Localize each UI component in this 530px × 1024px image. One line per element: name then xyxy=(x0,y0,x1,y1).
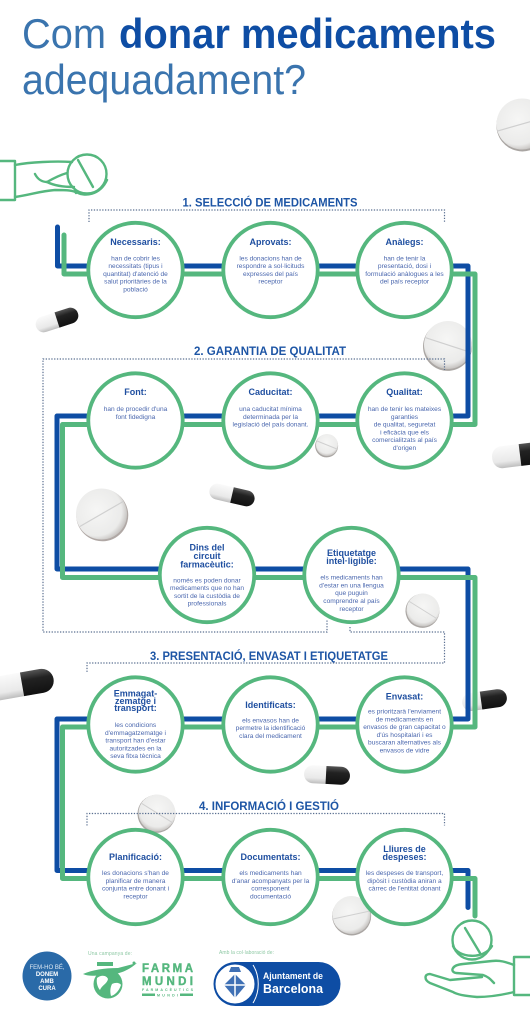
icon: capsule 2 xyxy=(208,482,256,508)
logo: Fem-ho bé, donem amb cura: CURA xyxy=(38,986,56,992)
title xyxy=(22,10,496,103)
icon: capsule right edge xyxy=(491,440,530,469)
panel: Emmagatzematge i transport xyxy=(88,677,183,772)
heading: section 4: 4. INFORMACIÓ I GESTIÓ xyxy=(199,798,339,813)
icon: capsule right of Envasat xyxy=(461,688,508,712)
panel: Dins del circuit farmacèutic: medicaments que no han xyxy=(170,585,244,592)
panel: Caducitat: legislació del país donant. xyxy=(233,422,309,429)
panel: Etiquetatge intel·ligible: receptor xyxy=(339,606,364,613)
panel: Envasat: Envasat: xyxy=(386,692,423,702)
panel: Documentats: els medicaments han xyxy=(239,870,302,877)
logo: Farmamundi xyxy=(83,951,194,998)
section bracket dotted lines xyxy=(43,210,444,826)
panel: Qualitat xyxy=(357,373,452,468)
icon: capsule centre xyxy=(304,765,350,785)
panel: Emmagatzematge i transport: transport han d'estar xyxy=(105,738,166,745)
panel: Anàlegs: formulació anàlogues a les xyxy=(365,271,444,278)
panel: Documentats xyxy=(223,830,318,924)
panel: Envasat: envasos de vidre xyxy=(380,748,430,754)
icon: tablet bottom xyxy=(328,892,375,939)
panel: Documentats: corresponent xyxy=(251,886,290,893)
panel: Aprovats: receptor xyxy=(258,279,283,286)
panel: Planificació xyxy=(88,830,183,924)
icon: receiving hand with tablet xyxy=(426,920,530,997)
heading: section 2: 2. GARANTIA DE QUALITAT xyxy=(194,344,347,358)
logo: Fem-ho bé, donem amb cura: DONEM xyxy=(36,972,58,978)
panel: Identificats: els envasos han de xyxy=(242,717,299,724)
logo: Farmamundi: FARMA xyxy=(142,963,193,975)
panel: Identificats xyxy=(223,677,318,772)
panel: Font: han de procedir d'una xyxy=(104,406,168,413)
title: donar medicaments xyxy=(119,10,496,57)
logo: Fem-ho bé, donem amb cura: FEM-HO BÉ, xyxy=(29,964,65,971)
panel: Identificats: clara del medicament xyxy=(239,733,302,740)
panel: Etiquetatge intel·ligible: d'estar en una llengua xyxy=(319,582,384,589)
panel: Lliures de despeses: Lliures de xyxy=(383,844,426,854)
panel: Planificació: receptor xyxy=(123,893,148,900)
panel: Documentats: Documentats: xyxy=(240,852,301,862)
panel: Caducitat: determinada per la xyxy=(243,414,298,421)
panel: Qualitat: d'origen xyxy=(393,445,416,452)
panel: Necessaris: quantitat) d'atenció de xyxy=(103,271,168,278)
panel: Envasat xyxy=(357,677,452,772)
logo: Farmamundi: FARMACÈUTICS xyxy=(142,987,194,992)
logo: Ajuntament de Barcelona: Barcelona xyxy=(263,982,324,996)
panel: Aprovats: Aprovats: xyxy=(249,237,292,247)
panel: Lliures de despeses: dipòsit i custòdia aniran a xyxy=(367,878,442,885)
panel: Planificació: conjunta entre donant i xyxy=(102,886,170,893)
panel: Caducitat: Caducitat: xyxy=(248,387,293,397)
panel: Envasat: envasos de gran capacitat o xyxy=(363,724,446,731)
icon: capsule 1 xyxy=(34,306,80,334)
panel: Necessaris xyxy=(88,223,183,317)
panel: Anàlegs: Anàlegs: xyxy=(385,237,424,247)
panel: Necessaris: han de cobrir les xyxy=(111,255,161,262)
panel: Identificats: permetre la identificació xyxy=(236,725,306,732)
panel: Dins del circuit farmacèutic xyxy=(160,528,254,622)
panel: Lliures de despeses xyxy=(357,830,452,924)
panel: Envasat: es prioritzarà l'enviament xyxy=(368,708,441,716)
panel: Aprovats: respondre a sol·licituds xyxy=(237,263,305,270)
panel: Dins del circuit farmacèutic: Dins del xyxy=(189,542,225,552)
heading: section 3: 3. PRESENTACIÓ, ENVASAT I ETIQUETATGE xyxy=(150,648,388,663)
panel: Anàlegs: presentació, dosi i xyxy=(378,263,432,270)
title: Com xyxy=(22,10,106,57)
panel: Planificació: planificar de manera xyxy=(106,878,166,885)
panel: Emmagatzematge i transport: autoritzades en la xyxy=(109,745,162,752)
panel: Font: Font: xyxy=(124,387,147,397)
panel: Necessaris: salut prioritàries de la xyxy=(104,279,167,286)
icon: giving hand with tablet xyxy=(0,154,107,200)
panel: Emmagatzematge i transport: seva fitxa tècnica xyxy=(110,753,161,760)
panel: Qualitat: han de tenir les mateixes xyxy=(368,406,442,413)
panel: Font: font fidedigna xyxy=(116,414,156,421)
panel: Envasat: de medicaments en xyxy=(376,716,434,723)
panel: Planificació: les donacions s'han de xyxy=(102,870,169,877)
panel: Etiquetatge intel·ligible xyxy=(304,528,399,622)
panel: Aprovats: expresses del país xyxy=(243,271,299,278)
panel: Dins del circuit farmacèutic: professionals xyxy=(188,601,227,608)
panel: Qualitat: Qualitat: xyxy=(386,387,423,397)
panel: Lliures de despeses: despeses: xyxy=(382,852,427,862)
panel: Emmagatzematge i transport: Emmagat- xyxy=(114,688,157,698)
panel: Anàlegs xyxy=(357,223,452,317)
panel: Etiquetatge intel·ligible: Etiquetatge xyxy=(327,548,376,558)
panel: Etiquetatge intel·ligible: intel·ligible: xyxy=(326,556,377,566)
panel: Necessaris: població xyxy=(123,286,148,294)
panel: Caducitat: una caducitat mínima xyxy=(239,406,302,413)
logo: Ajuntament de Barcelona xyxy=(214,950,340,1006)
panel: Emmagatzematge i transport: transport: xyxy=(114,703,157,713)
panel: Qualitat: de qualitat, seguretat xyxy=(374,422,435,429)
icon: small tablet xyxy=(312,430,342,461)
panel: Anàlegs: han de tenir la xyxy=(384,255,426,262)
panel: Emmagatzematge i transport: d'emmagatzematge i xyxy=(105,730,167,737)
panel: Qualitat: garanties xyxy=(391,414,419,421)
panel: Lliures de despeses: càrrec de l'entitat donant xyxy=(368,886,441,893)
panel: Etiquetatge intel·ligible: comprendre al país xyxy=(323,598,380,605)
panel: Font xyxy=(88,373,183,468)
icon: large tablet left xyxy=(66,479,138,551)
panel: Caducitat xyxy=(223,373,318,468)
logo: Fem-ho bé, donem amb cura: AMB xyxy=(40,979,54,985)
panel: Documentats: documentació xyxy=(250,893,291,900)
panel: Envasat: buscaran alternatives als xyxy=(368,740,442,747)
panel: Qualitat: comercialitzats al país xyxy=(372,437,438,444)
panel: Dins del circuit farmacèutic: circuit xyxy=(193,551,221,561)
panel: Dins del circuit farmacèutic: sortit de la custòdia de xyxy=(174,593,240,600)
panel: Lliures de despeses: les despeses de transport, xyxy=(366,870,443,877)
logo: Farmamundi: MUNDI xyxy=(142,976,193,988)
logo: Farmamundi: Una campanya de: xyxy=(88,951,132,957)
panel: Documentats: d'anar acompanyats per la xyxy=(232,878,310,885)
blue route line xyxy=(57,227,468,908)
panel: Aprovats: les donacions han de xyxy=(239,255,302,262)
panel: Emmagatzematge i transport: les condicions xyxy=(115,722,157,729)
icon: tablet beside section 2 xyxy=(417,315,479,377)
green route line xyxy=(62,235,475,916)
panel: Necessaris: Necessaris: xyxy=(110,237,161,247)
logo: Ajuntament de Barcelona: Amb la col·laboració de: xyxy=(219,950,274,956)
panel: Identificats: Identificats: xyxy=(245,700,296,710)
panel: Etiquetatge intel·ligible: que puguin xyxy=(335,590,368,597)
panel: Qualitat: i eficàcia que els xyxy=(380,429,430,436)
logo: Ajuntament de Barcelona: Ajuntament de xyxy=(263,971,323,981)
panel: Etiquetatge intel·ligible: els medicaments han xyxy=(320,575,383,582)
icon: tablet near Etiquetatge xyxy=(399,587,446,634)
panel: Planificació: Planificació: xyxy=(109,852,162,862)
panel: Aprovats xyxy=(223,223,318,317)
panel: Anàlegs: del país receptor xyxy=(380,279,430,286)
panel: Emmagatzematge i transport: zematge i xyxy=(115,696,156,706)
panel: Envasat: d'ús hospitalari i es xyxy=(377,732,433,739)
icon: tablet top right xyxy=(490,92,530,158)
panel: Necessaris: necessitats (tipus i xyxy=(108,263,163,270)
panel: Dins del circuit farmacèutic: només es poden donar xyxy=(173,577,242,584)
heading: section 1: 1. SELECCIÓ DE MEDICAMENTS xyxy=(182,194,358,210)
logo: Fem-ho bé, donem amb cura xyxy=(22,952,72,1000)
logo: Farmamundi: MUNDI xyxy=(157,994,178,998)
icon: tablet section 4 xyxy=(130,787,183,840)
icon: capsule left edge xyxy=(0,667,56,702)
panel: Dins del circuit farmacèutic: farmacèutic: xyxy=(180,560,234,570)
title: adequadament? xyxy=(22,56,306,103)
